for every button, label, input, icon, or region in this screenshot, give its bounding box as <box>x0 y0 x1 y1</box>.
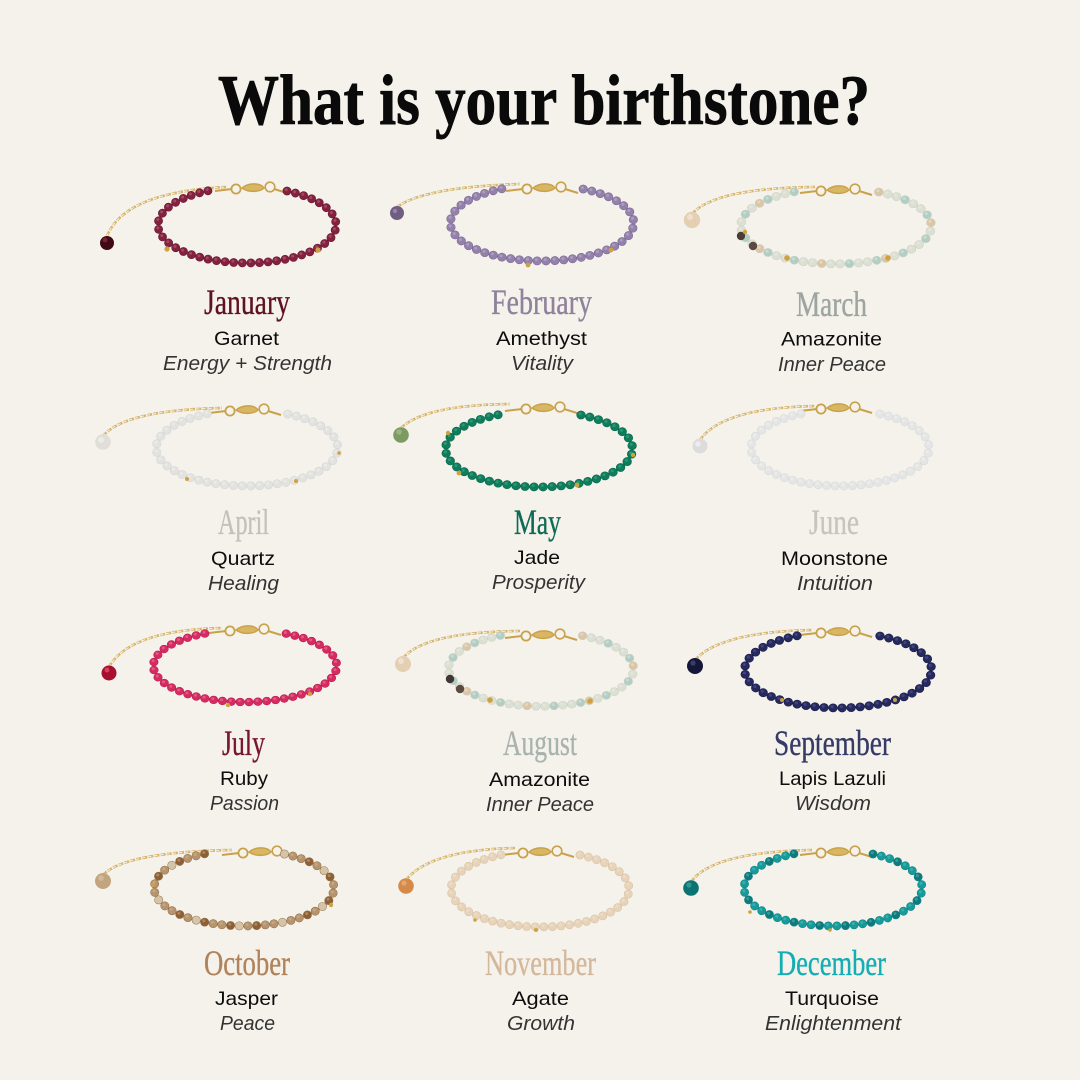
month: October: October <box>204 943 290 983</box>
bracelet: ruby <box>102 624 337 707</box>
month: March: March <box>796 284 867 324</box>
month: May: May <box>514 502 561 542</box>
panel: November <box>398 846 629 1035</box>
month: November: November <box>485 943 596 983</box>
panel: July <box>102 624 337 815</box>
bracelet: turquoise <box>683 846 922 932</box>
month: August: August <box>503 723 577 763</box>
stone: Amazonite: Amazonite <box>489 769 590 791</box>
meaning: Passion: Passion <box>210 793 279 815</box>
meaning: Inner Peace: Inner Peace <box>486 794 594 816</box>
stone: Jade: Jade <box>514 547 560 569</box>
bracelet: jade <box>393 402 635 487</box>
meaning: Wisdom: Wisdom <box>795 793 871 815</box>
meaning: Intuition: Intuition <box>797 573 873 595</box>
bracelet: moonstone <box>692 402 929 486</box>
bracelet: jasper <box>95 846 334 926</box>
bracelet: amazonite <box>395 629 634 706</box>
bracelet: quartz <box>95 404 341 486</box>
panel: March <box>684 184 931 376</box>
panel: June <box>692 402 929 595</box>
month: September: September <box>774 723 891 763</box>
month: February: February <box>491 282 592 322</box>
meaning: Vitality: Vitality <box>511 353 574 375</box>
stone: Amethyst: Amethyst <box>496 328 588 350</box>
month: June: June <box>809 502 859 542</box>
bracelet: garnet <box>100 182 336 263</box>
panel: January <box>100 182 336 375</box>
stone: Lapis Lazuli: Lapis Lazuli <box>779 768 886 790</box>
bracelet: amethyst <box>390 182 634 267</box>
meaning: Prosperity: Prosperity <box>492 572 586 594</box>
meaning: Enlightenment: Enlightenment <box>765 1013 903 1035</box>
stone: Turquoise: Turquoise <box>785 988 879 1010</box>
panel: September <box>687 626 931 815</box>
meaning: Growth: Growth <box>507 1013 575 1035</box>
meaning: Healing: Healing <box>208 573 279 595</box>
bracelet: lapis lazuli <box>687 626 931 708</box>
bracelet: amazonite <box>684 184 931 264</box>
month: April: April <box>218 502 269 542</box>
stone: Amazonite: Amazonite <box>781 328 882 350</box>
panel: May <box>393 402 635 594</box>
stone: Agate: Agate <box>512 988 569 1010</box>
stone: Moonstone: Moonstone <box>781 548 888 570</box>
panel: December <box>683 846 922 1035</box>
meaning: Peace: Peace <box>220 1013 275 1035</box>
stone: Ruby: Ruby <box>220 768 268 790</box>
month: July: July <box>222 723 265 763</box>
panel: October <box>95 846 334 1035</box>
month: December: December <box>777 943 886 983</box>
panel: August <box>395 629 634 816</box>
stone: Jasper: Jasper <box>215 988 279 1010</box>
stone: Quartz: Quartz <box>211 548 275 570</box>
stone: Garnet: Garnet <box>214 328 280 350</box>
month: January: January <box>204 282 290 322</box>
bracelet: agate <box>398 846 629 932</box>
meaning: Energy + Strength: Energy + Strength <box>163 353 332 375</box>
panel: February <box>390 182 634 375</box>
title: What is your birthstone? <box>218 62 870 140</box>
panel: April <box>95 404 341 595</box>
meaning: Inner Peace: Inner Peace <box>778 354 886 376</box>
